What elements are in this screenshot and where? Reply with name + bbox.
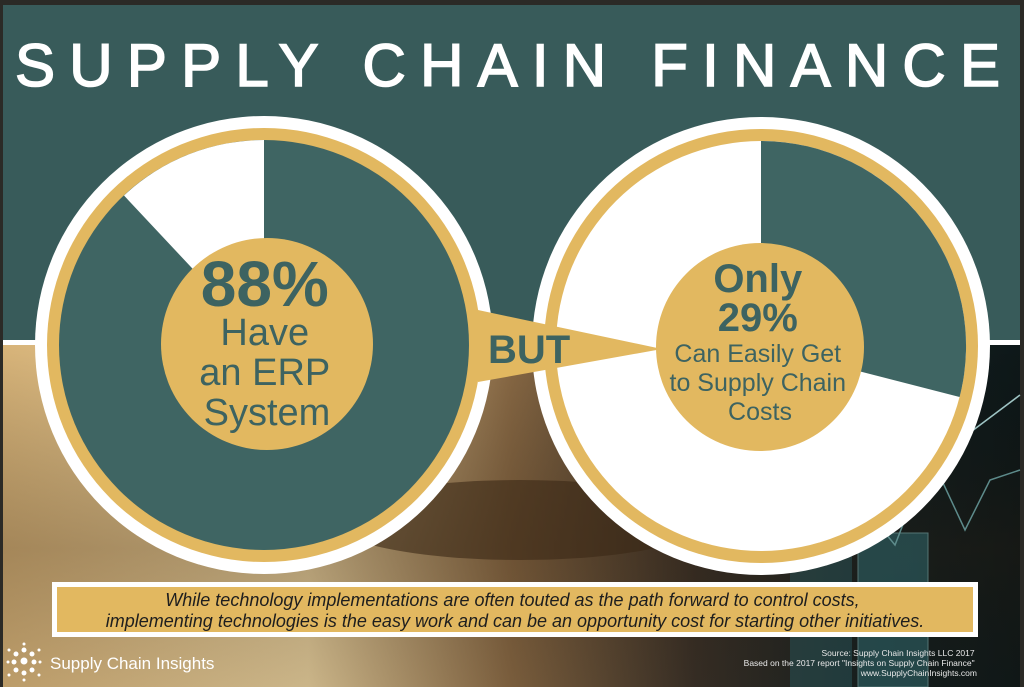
- stat circle: 29%: Costs: [728, 398, 792, 426]
- callout banner: implementing technologies is the easy work and can be an opportunity cost for starting other initiatives.: [106, 611, 924, 631]
- source text: Based on the 2017 report "Insights on Supply Chain Finance": [744, 658, 975, 668]
- logo: Supply Chain Insights: Supply Chain Insights: [50, 654, 214, 673]
- stat circle: 29%: 29%: [718, 296, 798, 340]
- stat circle: 88%: 88%: [201, 248, 329, 320]
- stat circle: 29%: Only: [713, 257, 803, 301]
- logo: Supply Chain Insights: [6, 642, 214, 682]
- stat circle: 29%: to Supply Chain: [670, 369, 846, 397]
- title: SUPPLY CHAIN FINANCE: [15, 32, 1000, 99]
- stat circle: 29%: [656, 243, 864, 451]
- stat circle: 88%: an ERP: [199, 352, 330, 394]
- arrow: BUT: BUT: [488, 328, 570, 372]
- stat circle: 88%: System: [204, 392, 330, 434]
- callout banner: While technology implementations are often touted as the path forward to control costs,: [165, 590, 860, 610]
- panel: left pie 88%: [35, 116, 493, 574]
- stat circle: 88%: [161, 238, 373, 450]
- teal header panel: [3, 5, 1020, 340]
- source text: www.SupplyChainInsights.com: [860, 668, 977, 678]
- stat circle: 88%: Have: [220, 312, 309, 354]
- stat circle: 29%: Can Easily Get: [674, 340, 841, 368]
- source text: Source: Supply Chain Insights LLC 2017: [822, 648, 975, 658]
- panel: right pie 29%: [532, 117, 990, 575]
- callout banner: [52, 582, 978, 637]
- arrow: BUT: [478, 310, 662, 382]
